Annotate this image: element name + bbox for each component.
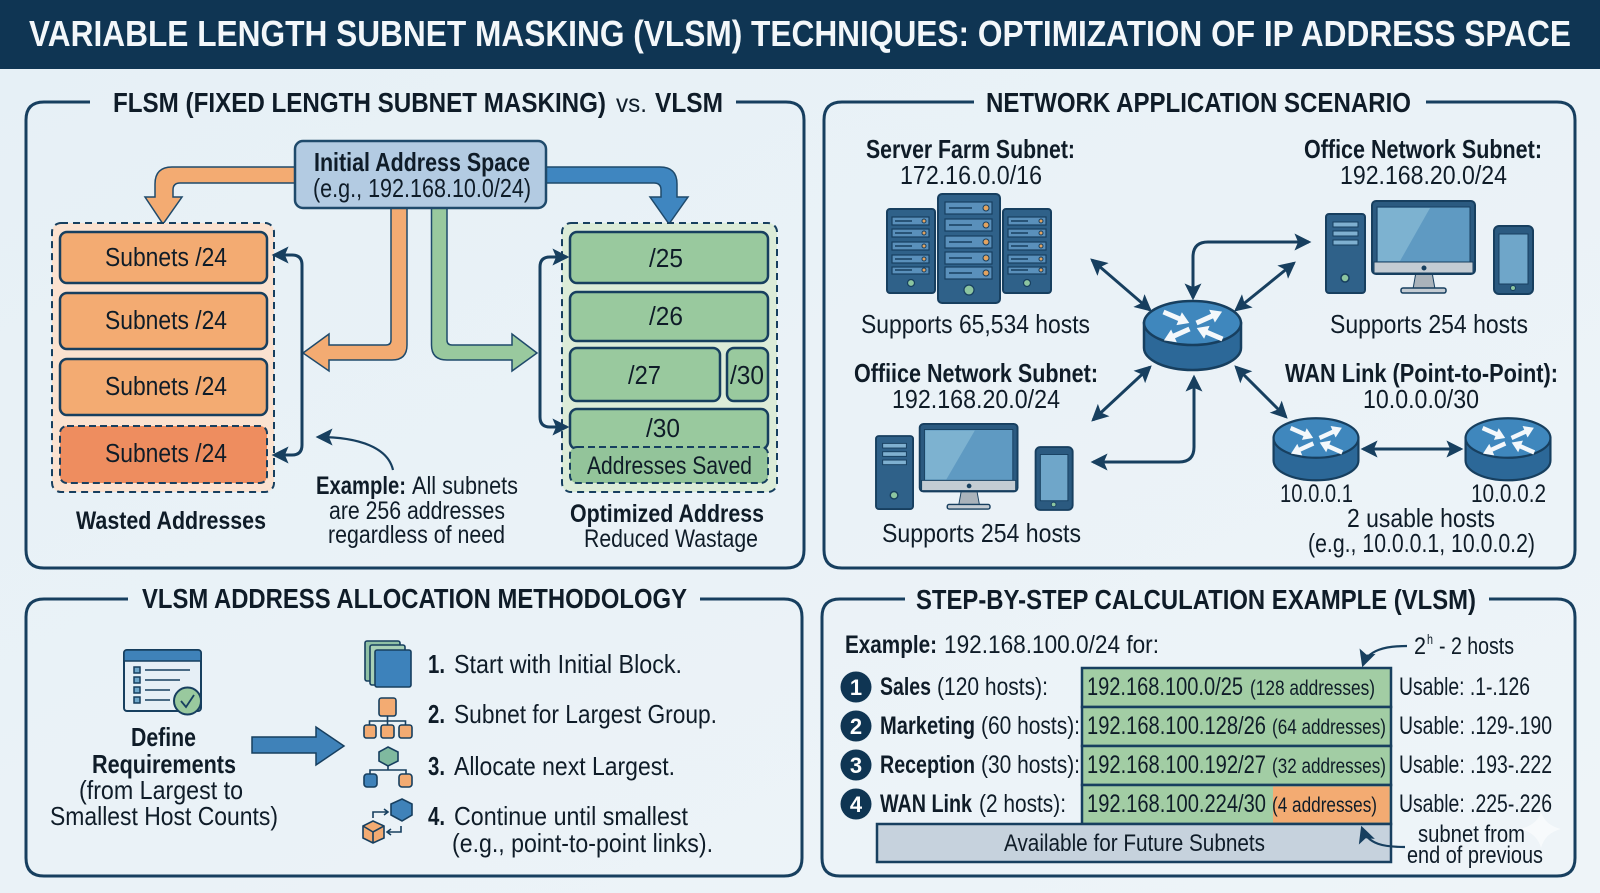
arrow: server to router xyxy=(1092,260,1150,310)
text: define requirements: (from Largest to xyxy=(79,775,243,805)
step 4 text xyxy=(428,801,713,858)
example note: Example: xyxy=(316,472,406,500)
subnet note: end of previous xyxy=(1407,842,1543,869)
label: office subnet bottom left: 192.168.20.0/24 xyxy=(892,384,1060,414)
icon: desktop and phone, top right xyxy=(1326,201,1533,294)
icon: WAN router 1 xyxy=(1274,418,1358,480)
label: WAN link: 10.0.0.0/30 xyxy=(1363,384,1479,414)
label: server farm subnet: Server Farm Subnet: xyxy=(866,134,1075,164)
allocation table: (32 addresses) xyxy=(1272,755,1386,778)
VLSM subnet stack: /27 xyxy=(628,362,661,390)
step row 3: Reception: (30 hosts): xyxy=(981,751,1080,779)
icon: desktop and phone, bottom left xyxy=(876,424,1073,510)
FLSM subnet stack: Subnets /24 xyxy=(105,244,227,272)
initial address space box xyxy=(295,141,546,208)
step row 1: Sales: 1 xyxy=(850,675,862,700)
panel: network application scenario xyxy=(824,87,1575,568)
formula note: 2 xyxy=(1414,633,1426,660)
step 4 text: (e.g., point-to-point links). xyxy=(452,828,713,858)
arrow: router to lower office, elbow xyxy=(1093,377,1194,462)
step row 4: WAN Link xyxy=(840,788,1552,820)
allocation table: 192.168.100.224/30 xyxy=(1087,790,1266,818)
step row 1: Sales: Sales xyxy=(880,673,931,701)
formula note: - 2 hosts xyxy=(1439,633,1514,660)
label: server farm subnet: 172.16.0.0/16 xyxy=(900,160,1042,190)
step row 2: Marketing: 2 xyxy=(850,714,862,739)
step 3 text: Allocate next Largest. xyxy=(454,751,675,781)
text: define requirements xyxy=(50,722,278,831)
panel heading: FLSM vs VLSM: FLSM (FIXED LENGTH SUBNET MASKING) xyxy=(113,87,606,118)
arrow: FLSM double bracket xyxy=(274,255,302,455)
allocation table: 192.168.100.128/26 xyxy=(1087,712,1266,740)
formula note xyxy=(1414,631,1514,660)
step row 1: Sales xyxy=(840,672,1530,702)
text: define requirements: Define xyxy=(131,722,196,752)
allocation table: (128 addresses) xyxy=(1250,677,1375,700)
icon: WAN router 2 xyxy=(1466,418,1550,480)
text: define requirements: Requirements xyxy=(92,749,236,779)
arrow: VLSM double bracket xyxy=(540,257,567,427)
label: server farm subnet xyxy=(866,134,1075,190)
allocation table: 192.168.100.0/25 xyxy=(1087,673,1243,701)
arrow: orange toward FLSM subnets xyxy=(303,208,407,371)
label: optimized address: Optimized Address xyxy=(570,500,764,528)
label: WAN addresses: 2 usable hosts xyxy=(1347,503,1495,533)
icon: requirements checklist xyxy=(124,650,201,714)
step 2 text: Subnet for Largest Group. xyxy=(454,699,717,729)
panel heading: FLSM vs VLSM: VLSM xyxy=(655,87,723,118)
arrow: office to router, diagonal xyxy=(1236,263,1294,310)
panel heading: network scenario: NETWORK APPLICATION SCENARIO xyxy=(986,87,1411,118)
arrow: router to office, elbow xyxy=(1193,242,1309,298)
step row 2: Marketing: Usable: .129-.190 xyxy=(1399,712,1552,740)
header banner xyxy=(0,0,1600,69)
FLSM subnet stack: Subnets /24 xyxy=(105,373,227,401)
icon: server rack trio xyxy=(887,194,1051,303)
icon: central router xyxy=(1144,301,1241,370)
VLSM subnet stack: /25 xyxy=(649,245,683,273)
formula note: h xyxy=(1427,631,1433,647)
label: WAN addresses: 10.0.0.2 xyxy=(1471,480,1546,508)
step row 2: Marketing: (60 hosts): xyxy=(981,712,1080,740)
allocation table: (4 addresses) xyxy=(1272,794,1377,817)
future subnets bar xyxy=(877,824,1391,862)
label: office subnet bottom left xyxy=(854,358,1098,414)
step row 2: Marketing: Marketing xyxy=(880,712,975,740)
label: optimized address xyxy=(570,500,764,553)
arrow: example pointer xyxy=(318,437,393,470)
future subnets bar: Available for Future Subnets xyxy=(1004,830,1265,857)
step 1 text: 1. xyxy=(428,649,445,679)
label: WAN link xyxy=(1285,358,1558,414)
panel heading: FLSM vs VLSM: vs. xyxy=(616,90,647,118)
FLSM subnet stack: Subnets /24 xyxy=(105,307,227,335)
example line xyxy=(845,631,1159,659)
step 3 text: 3. xyxy=(428,751,445,781)
allocation table xyxy=(1082,668,1391,824)
example line: Example: xyxy=(845,631,937,659)
example note: regardless of need xyxy=(328,521,505,549)
label: office subnet top right xyxy=(1304,134,1542,190)
initial address space box: (e.g., 192.168.10.0/24) xyxy=(313,173,531,203)
icon: allocate tree xyxy=(364,747,412,787)
label: office subnet top right: 192.168.20.0/24 xyxy=(1340,160,1507,190)
arrow: requirements to steps xyxy=(252,727,344,765)
step row 1: Sales: Usable: .1-.126 xyxy=(1399,673,1530,701)
step row 1: Sales: (120 hosts): xyxy=(937,673,1048,701)
allocation table: (64 addresses) xyxy=(1272,716,1386,739)
arrow: formula to table xyxy=(1363,646,1407,665)
example line: 192.168.100.0/24 for: xyxy=(944,631,1159,659)
arrow: green toward VLSM subnets xyxy=(432,208,537,371)
initial address space box: Initial Address Space xyxy=(314,147,530,177)
step row 3: Reception: Usable: .193-.222 xyxy=(1399,751,1552,779)
step row 4: WAN Link: (2 hosts): xyxy=(979,790,1066,818)
icon: hexagon and box cycle xyxy=(363,799,412,843)
label: optimized address: Reduced Wastage xyxy=(584,525,758,553)
label: supports 254 hosts, left: Supports 254 hosts xyxy=(882,518,1081,548)
subnet note xyxy=(1407,821,1543,869)
arrow: blue to VLSM column xyxy=(546,167,688,224)
arrow: orange to FLSM column xyxy=(145,167,295,224)
example note: All subnets xyxy=(412,472,518,500)
label: WAN addresses: 10.0.0.1 xyxy=(1280,480,1353,508)
FLSM subnet stack: Subnets /24 xyxy=(105,440,227,468)
panel heading: methodology: VLSM ADDRESS ALLOCATION METHODOLOGY xyxy=(142,583,687,614)
step row 4: WAN Link: Usable: .225-.226 xyxy=(1399,790,1552,818)
VLSM subnet stack xyxy=(562,223,777,492)
panel: step-by-step calculation xyxy=(822,584,1575,876)
step row 2: Marketing xyxy=(840,710,1552,742)
arrow: point-to-point link xyxy=(1363,448,1461,450)
subnet note: subnet from xyxy=(1418,821,1525,848)
arrow: router to lower office, diagonal xyxy=(1093,367,1150,420)
text: define requirements: Smallest Host Counts) xyxy=(50,801,278,831)
FLSM subnet stack xyxy=(52,223,274,492)
VLSM subnet stack: Addresses Saved xyxy=(587,452,752,480)
label: wasted addresses: Wasted Addresses xyxy=(76,507,266,535)
allocation table: 192.168.100.192/27 xyxy=(1087,751,1266,779)
step 4 text: 4. xyxy=(428,801,445,831)
example note xyxy=(316,472,518,549)
icon: org tree xyxy=(364,698,412,738)
VLSM subnet stack: /30 xyxy=(730,362,764,390)
label: WAN addresses: (e.g., 10.0.0.1, 10.0.0.2) xyxy=(1308,528,1535,558)
step row 4: WAN Link: WAN Link xyxy=(880,790,972,818)
step 4 text: Continue until smallest xyxy=(454,801,689,831)
step 1 text: Start with Initial Block. xyxy=(454,649,682,679)
panel heading: calculation: STEP-BY-STEP CALCULATION EXAMPLE (VLSM) xyxy=(916,584,1476,615)
label: WAN addresses xyxy=(1280,480,1546,558)
panel: allocation methodology xyxy=(26,583,802,876)
step row 3: Reception xyxy=(840,750,1552,780)
label: supports 65,534 hosts: Supports 65,534 hosts xyxy=(861,309,1090,339)
arrow: note to table xyxy=(1362,828,1405,847)
step row 4: WAN Link: 4 xyxy=(850,792,863,817)
VLSM subnet stack: /26 xyxy=(649,303,683,331)
example note: are 256 addresses xyxy=(329,497,505,525)
label: office subnet top right: Office Network Subnet: xyxy=(1304,134,1542,164)
label: supports 254 hosts, right: Supports 254 hosts xyxy=(1330,309,1528,339)
icon: stacked blocks xyxy=(365,641,411,687)
arrow: router to WAN xyxy=(1236,367,1286,417)
step 2 text: 2. xyxy=(428,699,445,729)
step row 3: Reception: Reception xyxy=(880,751,975,779)
VLSM subnet stack: /30 xyxy=(646,415,680,443)
label: office subnet bottom left: Offiice Network Subnet: xyxy=(854,358,1098,388)
panel: FLSM vs VLSM xyxy=(26,87,804,568)
step row 3: Reception: 3 xyxy=(850,753,862,778)
